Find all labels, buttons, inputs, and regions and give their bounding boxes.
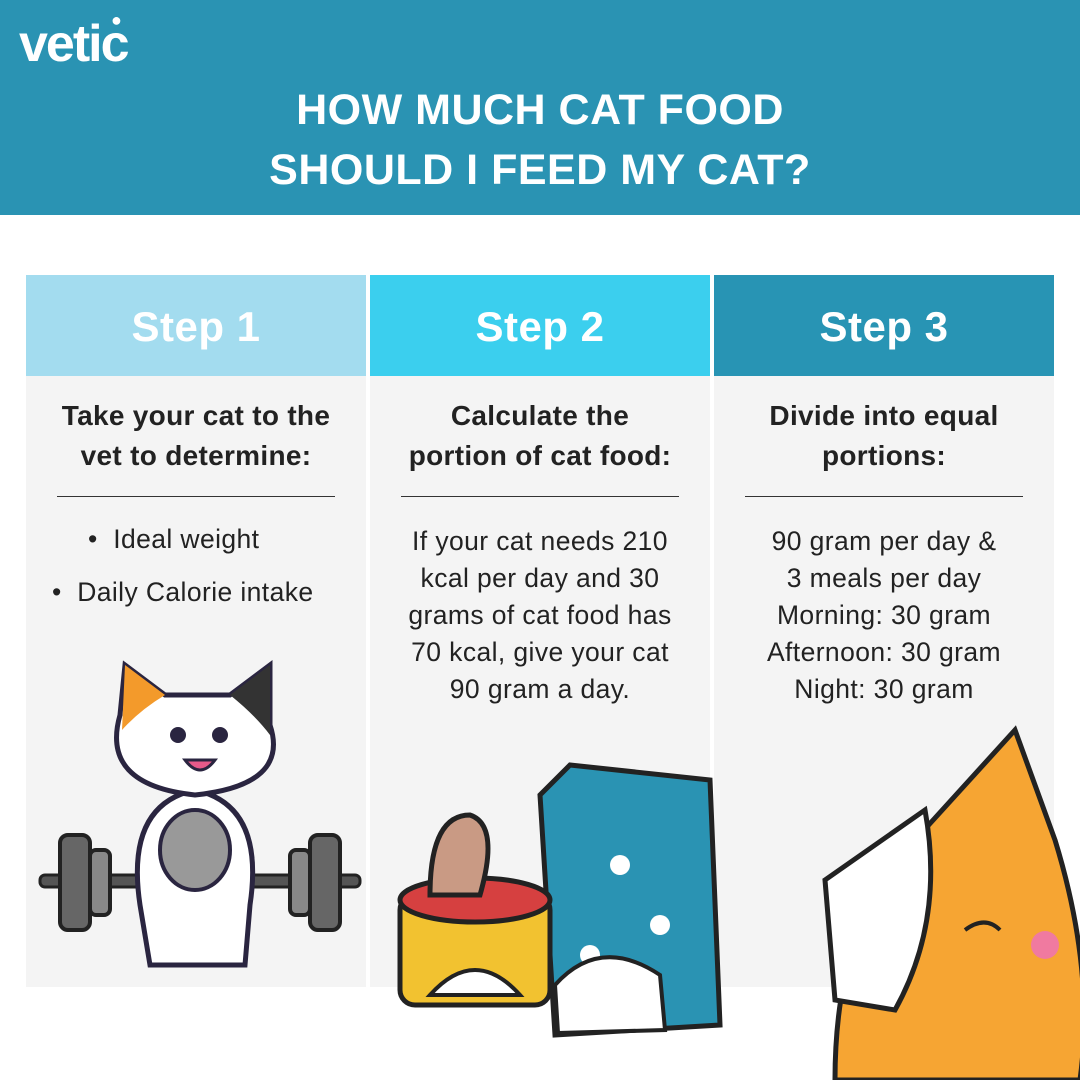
illustration: cat lifting barbell xyxy=(38,660,362,968)
illustration: cat food can and bag xyxy=(398,762,723,1038)
panel: step 2: Calculate the xyxy=(451,400,629,431)
panel: step 3: Divide into equal xyxy=(769,400,999,431)
title xyxy=(269,86,811,194)
panel: step 2: portion of cat food: xyxy=(409,440,671,471)
illustration: orange cat with bowl xyxy=(822,725,1080,1080)
panel: step 1: vet to determine: xyxy=(81,440,311,471)
panel: step 3: Night: 30 gram xyxy=(794,674,974,704)
panel: step 3: Step 3 xyxy=(819,303,949,350)
panel: step 2: 70 kcal, give your cat xyxy=(411,637,669,667)
panel: step 1: Step 1 xyxy=(131,303,261,350)
panel: step 3: Afternoon: 30 gram xyxy=(767,637,1001,667)
logo: ● xyxy=(111,10,120,30)
panel: step 1: • Daily Calorie intake xyxy=(52,577,314,607)
panel: step 2: Step 2 xyxy=(475,303,605,350)
panel: step 2: kcal per day and 30 xyxy=(421,563,659,593)
logo: vetic xyxy=(19,15,128,73)
panel: step 1: Take your cat to the xyxy=(62,400,330,431)
panel: step 2 xyxy=(370,275,710,987)
panel: step 3 xyxy=(714,275,1054,987)
panel: step 3: Morning: 30 gram xyxy=(777,600,991,630)
panel: step 3: portions: xyxy=(822,440,946,471)
title: HOW MUCH CAT FOOD xyxy=(296,86,784,134)
panel: step 3: 3 meals per day xyxy=(787,563,981,593)
panel: step 3: 90 gram per day & xyxy=(772,526,996,556)
panel: step 2: grams of cat food has xyxy=(408,600,672,630)
header banner xyxy=(0,0,1080,215)
panel: step 2: 90 gram a day. xyxy=(450,674,630,704)
panel: step 2: If your cat needs 210 xyxy=(412,526,668,556)
title: SHOULD I FEED MY CAT? xyxy=(269,146,811,194)
panel: step 1: • Ideal weight xyxy=(88,524,259,554)
panel: step 1 xyxy=(26,275,366,987)
